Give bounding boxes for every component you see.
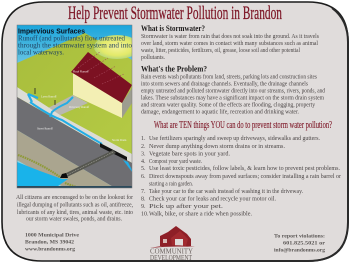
numbered list of ten actions: 8. [141,196,146,202]
illustration caption [18,34,133,56]
bottom edge [17,186,132,188]
sun glow on lawn [94,35,132,59]
violation reporting contact: info@brandonms.org [274,248,325,254]
paragraph: what is stormwater: over land, storm water comes in contact with many substances such as animal [141,41,318,47]
citizen notice paragraph: illegal dumping of pollutants such as oil, antifreeze, [17,202,134,208]
violation reporting contact: To report violations: [274,234,325,240]
numbered list of ten actions: 2. [141,144,146,150]
numbered list of ten actions: 7. [141,189,146,195]
address block: Brandon, MS 39042 [25,240,74,246]
numbered list of ten actions: 1. [141,136,146,142]
heading: What's the Problem?: What's the Problem? [141,64,207,74]
illustration caption: Runoff (and pollutants) flow untreated [18,34,125,42]
house walls [73,72,132,118]
roadside ground [17,130,115,188]
runoff labels: Storm Drain [112,138,127,142]
paragraph: the problem: into storm sewers and drainage channels. Eventually, the drainage channels [141,82,309,88]
paragraph: the problem: and stream water quality. Some of the effects are flooding, clogging, property [141,102,315,108]
runoff labels: Street Runoff [37,126,53,130]
right sidewalk [57,115,132,163]
logo: community development: DEVELOPMENT [150,254,193,262]
drain pipe [66,150,116,177]
numbered list of ten actions: 5. [141,166,146,172]
violation reporting contact [274,234,326,254]
paragraph: the problem: empty untreated and polluted stormwater directly into our streams, rivers, ponds, and [141,88,325,94]
numbered list of ten actions: starting a rain garden. [149,182,193,188]
numbered list of ten actions: Take your car to the car wash instead of washing it in the driveway. [149,188,303,195]
numbered list of ten actions: 3. [141,151,146,157]
address block: www.brandonms.org [25,246,75,252]
storm drain inlet [100,143,127,160]
numbered list of ten actions: Pick up after your pet. [149,203,224,210]
illustration heading: Impervious Surfaces: Impervious Surfaces [18,26,85,36]
roof runoff label: Roof Runoff [73,70,89,74]
illustration frame [17,25,132,188]
numbered list of ten actions: Walk, bike, or share a ride when possible. [149,212,253,218]
logo wordmark: COMMUNITY [150,248,193,256]
illustration caption: local waterways. [18,48,64,56]
numbered list of ten actions: 6. [141,174,146,180]
numbered list of ten actions: Use fertilizers sparingly and sweep up driveways, sidewalks and gutters. [149,135,320,142]
numbered list of ten actions: Check your car for leaks and recycle your motor oil. [149,195,276,202]
lawn [17,33,132,165]
illustration: impervious surfaces stormwater diagram [17,25,140,188]
paragraph: what is stormwater: waste, litter, pesticides, fertilizers, oil, grease, loose soil and other potential [141,47,300,54]
numbered list of ten actions: Vegetate bare spots in your yard. [149,151,230,157]
road [17,97,132,188]
numbered list of ten actions: Direct downspouts away from paved surfaces; consider installing a rain barrel or [149,173,341,180]
house roof [71,52,132,103]
numbered list of ten actions: Use least toxic pesticides, follow labels, & learn how to prevent pest problems. [149,165,340,172]
pipe outfall [60,173,68,178]
violation reporting contact: 601.825.5021 or [283,240,326,246]
stream water [17,162,68,188]
runoff labels [37,94,127,142]
illustration caption: through the stormwater system and into [18,42,133,50]
logo: community development [150,226,195,262]
numbered list of ten actions: Compost your yard waste. [149,159,202,165]
paragraph: the problem [141,74,325,116]
paragraph: what is stormwater: Stormwater is water from rain that does not soak into the ground. As it travels [141,33,320,40]
citizen notice paragraph: our storm water swales, ponds, and drains. [26,216,123,222]
numbered list of ten actions: Never dump anything down storm drains or in streams. [149,144,286,150]
numbered list of ten actions: 10. [141,212,149,218]
gutter water [30,102,102,144]
address block [25,232,80,252]
driveway runoff water [50,97,73,117]
numbered list of ten actions: 4. [141,159,146,165]
stream bank grasses [18,155,76,187]
runoff labels: Driveway Runoff [69,105,89,109]
paragraph: the problem: lakes. These substances may have a significant impact on the storm drain system [141,94,324,102]
address block: 1000 Municipal Drive [25,232,80,238]
heading: What is Stormwater?: What is Stormwater? [141,24,205,33]
paragraph: the problem: Rain events wash pollutants from land, streets, parking lots and construction sites [141,74,318,80]
right gutter water [123,160,132,172]
driveway [48,95,88,116]
numbered list of ten actions [141,135,341,218]
citizen notice paragraph [16,194,134,222]
logo house icon [150,226,195,248]
signposts [35,88,55,105]
citizen notice paragraph: All citizens are encouraged to be on the lookout for [16,194,133,201]
paragraph: what is stormwater: pollutants. [141,55,166,61]
left sidewalk [17,87,60,120]
citizen notice paragraph: lubricants of any kind, tires, animal waste, etc. into [17,209,133,216]
sky [17,25,132,188]
paragraph: what is stormwater [141,33,320,61]
paragraph: the problem: damage, endangerment to aquatic life, recreation and drinking water. [141,108,300,116]
lawn puddle runoff [28,94,38,102]
runoff labels: Lawn Runoff [41,94,56,98]
numbered list of ten actions: 9. [141,204,146,210]
